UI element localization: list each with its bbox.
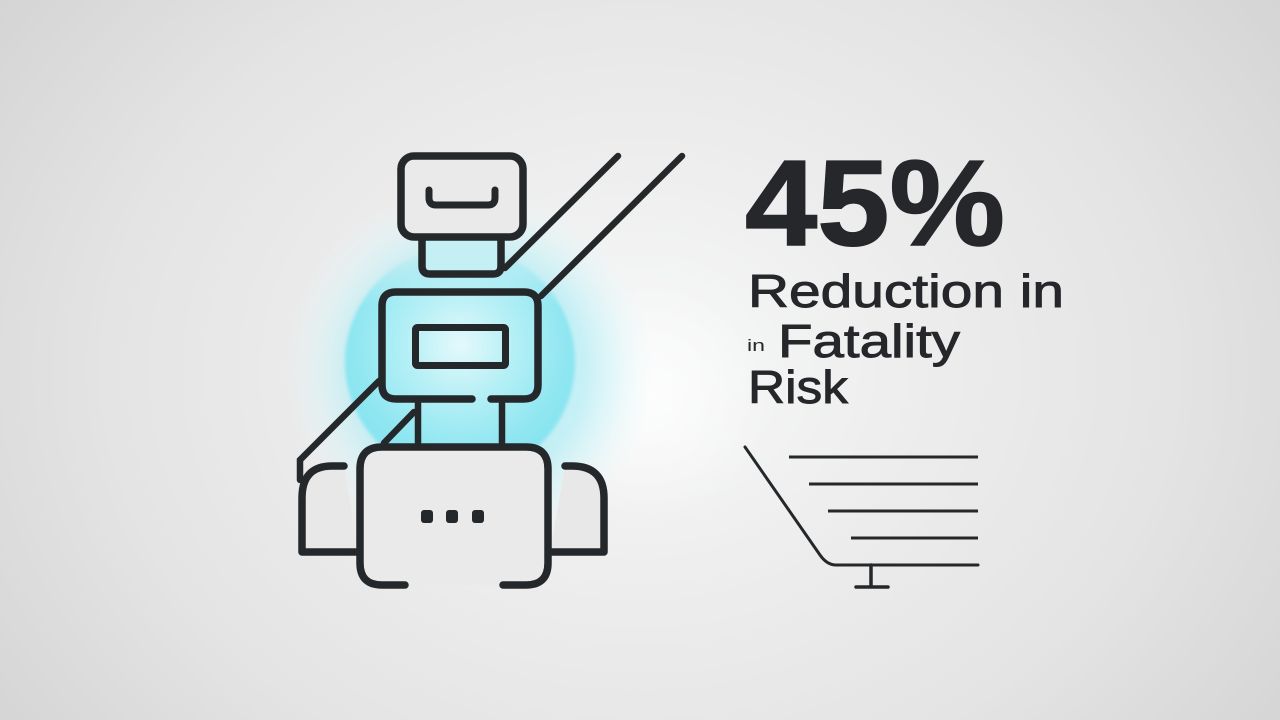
seat belt lower strap — [300, 381, 414, 480]
left arm — [302, 466, 358, 552]
icon: declining funnel chart — [745, 447, 978, 587]
smile — [429, 190, 495, 205]
lower neck — [418, 403, 502, 446]
dots — [421, 510, 484, 523]
chest badge — [416, 328, 506, 366]
cyan glow — [315, 224, 634, 506]
body — [360, 447, 548, 585]
white sheen — [530, 280, 770, 520]
head — [401, 156, 523, 237]
right arm — [550, 466, 604, 552]
line: Risk: Risk — [748, 361, 849, 413]
line: Fatality: Fatality — [778, 315, 960, 367]
icon: person wearing seat belt — [300, 156, 682, 585]
axis slope and baseline — [745, 447, 978, 565]
chart lines — [789, 457, 978, 538]
line: Reduction in: Reduction in — [748, 265, 1064, 317]
seat belt upper strap — [505, 156, 682, 296]
neck — [422, 238, 501, 274]
statistic: 45%: 45% — [745, 135, 1005, 271]
stand — [856, 565, 888, 587]
torso — [382, 292, 538, 399]
label: Reduction in Fatality Risk — [747, 265, 1064, 413]
small stray text: in: in — [747, 336, 765, 355]
